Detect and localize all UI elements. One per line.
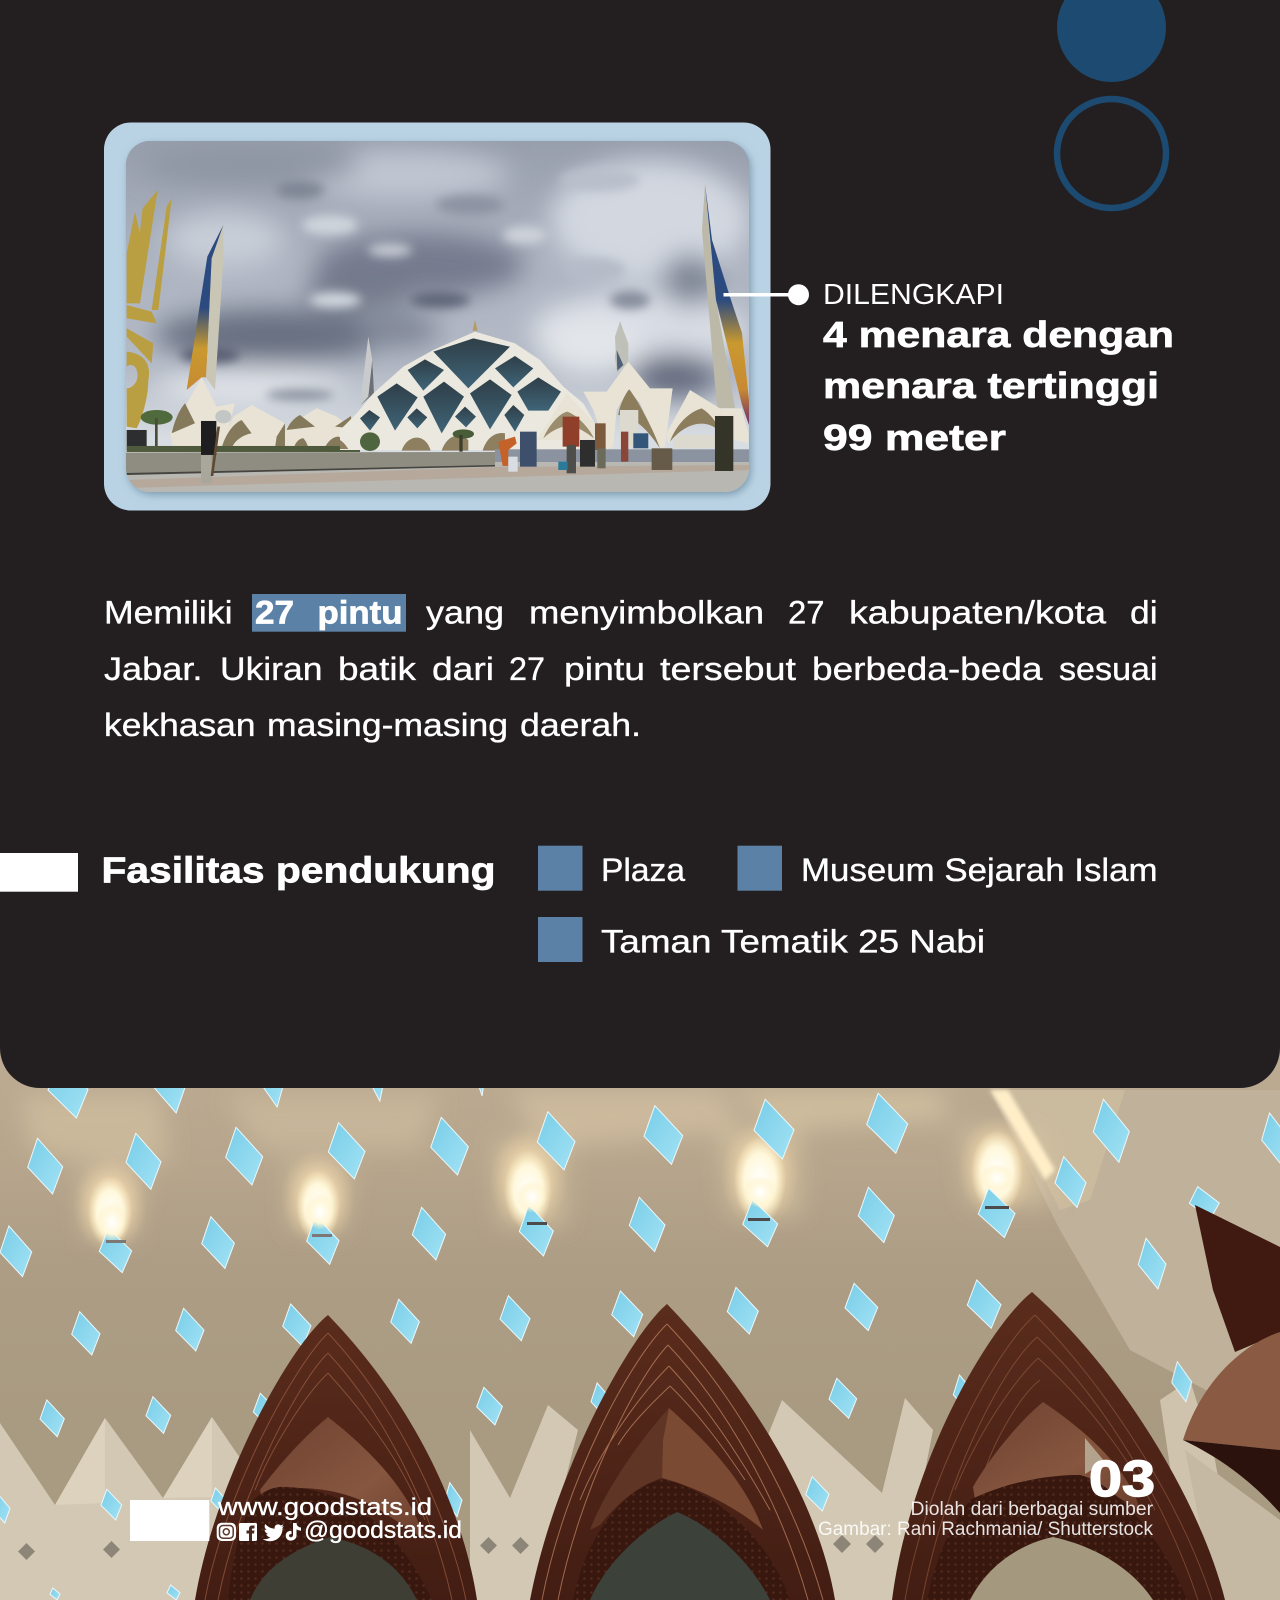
planter wall (126, 452, 495, 474)
dome (340, 332, 600, 450)
highlight: 27 pintu (252, 594, 406, 632)
paragraph: pintu (564, 651, 645, 687)
lit wall panels (20, 1090, 1050, 1238)
plaza ground base (126, 452, 749, 492)
callout: 4 menara: 99 meter (823, 417, 1006, 458)
icon: tiktok (286, 1523, 301, 1541)
gold sculpture (127, 190, 172, 428)
railing strip (495, 449, 752, 462)
dark main panel (0, 0, 1280, 1088)
white tab marker (0, 853, 78, 892)
arch 3 (892, 1292, 1225, 1600)
wall lights (72, 1090, 1055, 1255)
paragraph: menyimbolkan (529, 594, 764, 630)
arcade arches (340, 433, 505, 451)
lamp post (201, 455, 212, 483)
skylight diamonds (0, 1050, 1280, 1600)
paragraph: yang (426, 594, 504, 630)
right minaret (702, 184, 735, 408)
arch 2 (530, 1304, 835, 1600)
facility item: Taman Tematik 25 Nabi: Taman Tematik 25 Nabi (601, 924, 985, 960)
social handle: @goodstats.id (304, 1517, 462, 1544)
arch 1 (195, 1315, 477, 1600)
paragraph: daerah. (520, 707, 641, 743)
paving stripe (126, 465, 749, 488)
far minaret (615, 322, 628, 371)
paragraph: 27 (509, 651, 545, 687)
website: www.goodstats.id (217, 1494, 432, 1521)
lamp glow over diamonds (97, 1164, 1014, 1243)
paragraph: 27 (255, 594, 294, 630)
paragraph: 27 (788, 594, 824, 630)
icon: instagram (217, 1523, 236, 1541)
paragraph: tersebut (660, 651, 796, 687)
right wall lit area (990, 1090, 1280, 1400)
logo placeholder (130, 1500, 209, 1541)
callout: 4 menara: DILENGKAPI (823, 279, 1004, 311)
source note: Diolah dari berbagai sumber (910, 1499, 1154, 1520)
white arcade tents (537, 393, 595, 440)
left side of photo (127, 190, 374, 483)
clouds (140, 145, 750, 404)
background photo: mosque interior wall (0, 1030, 1280, 1600)
paragraph: pintu (318, 594, 402, 630)
icon: twitter (262, 1524, 284, 1541)
decorative ring (1057, 99, 1166, 208)
heading: Fasilitas pendukung: Fasilitas pendukung (102, 850, 496, 890)
tents (170, 377, 342, 446)
decorative filled circle (1057, 0, 1166, 82)
left minaret (206, 225, 223, 390)
lower wall zigzag (0, 1380, 1280, 1600)
paragraph: batik (338, 651, 417, 687)
far minaret right (615, 321, 628, 372)
facility item: Museum Sejarah Islam (738, 846, 1158, 891)
facility item: Plaza: Plaza (601, 852, 685, 888)
workers (498, 416, 733, 473)
paragraph: dari (432, 651, 494, 687)
far minaret (360, 337, 373, 405)
source note: Gambar: Rani Rachmania/ Shutterstock (818, 1519, 1153, 1540)
paragraph: Memiliki (104, 594, 232, 630)
paragraph (104, 594, 1158, 743)
paragraph: masing-masing (267, 707, 508, 743)
photo: mosque exterior with minarets (126, 141, 752, 492)
callout: 4 menara: menara tertinggi (823, 365, 1159, 406)
facility item: Museum Sejarah Islam: Museum Sejarah Islam (801, 852, 1158, 888)
cloud texture (180, 168, 650, 401)
icon: facebook (239, 1523, 257, 1541)
callout: 4 menara: 4 menara dengan (823, 314, 1174, 355)
facility item: Taman Tematik 25 Nabi (538, 917, 985, 962)
paragraph: berbeda-beda (812, 651, 1043, 687)
right wall: wood and copper dome (1183, 1205, 1280, 1513)
callout: 4 menara (823, 279, 1174, 458)
callout pointer line (724, 284, 809, 305)
facility item: Plaza (538, 846, 685, 891)
palm and planting (141, 410, 173, 425)
paragraph: di (1130, 594, 1158, 630)
right side of photo (615, 184, 749, 425)
source note (818, 1499, 1154, 1540)
small grey wall diamonds (18, 1535, 884, 1560)
paragraph: Ukiran (220, 651, 322, 687)
paragraph: Jabar. (104, 651, 202, 687)
paragraph: kabupaten/kota (849, 594, 1106, 630)
photo card frame (104, 122, 770, 510)
page number: 03 (1089, 1450, 1155, 1507)
paragraph: sesuai (1059, 651, 1158, 687)
paragraph: kekhasan (104, 707, 255, 743)
